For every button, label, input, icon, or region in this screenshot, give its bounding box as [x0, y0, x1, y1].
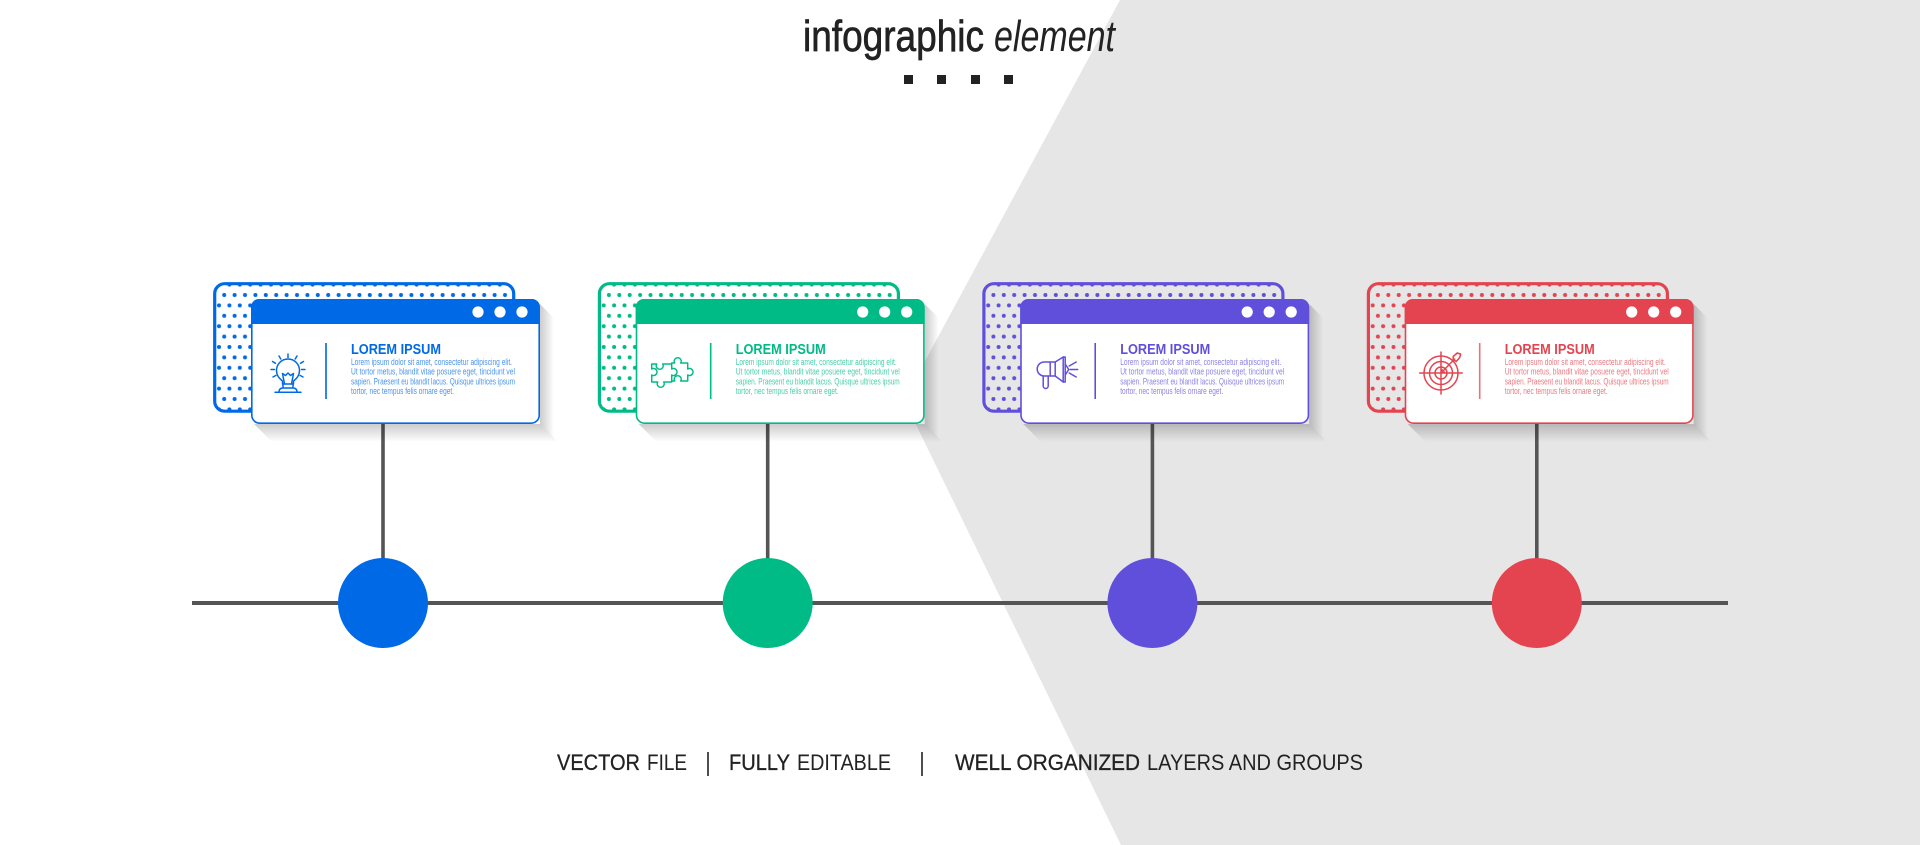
card header bar	[1405, 299, 1694, 324]
window dots	[1626, 306, 1681, 318]
icon: target with arrow	[1420, 352, 1462, 394]
body text: Ut tortor metus, blandit vitae posuere eget, tincidunt vel	[1120, 367, 1284, 377]
timeline node: blue	[338, 558, 428, 648]
heading: LOREM IPSUM	[1120, 342, 1210, 358]
footer caption: WELL ORGANIZED	[955, 750, 1140, 775]
divider	[325, 343, 327, 399]
dotted back card	[1368, 284, 1667, 411]
dotted back card	[599, 284, 898, 411]
card header bar	[251, 299, 540, 324]
body text: Lorem ipsum dolor sit amet, consectetur adipiscing elit.	[736, 357, 897, 367]
body text	[1120, 357, 1284, 396]
body text: Lorem ipsum dolor sit amet, consectetur adipiscing elit.	[1120, 357, 1281, 367]
body text: tortor, nec tempus felis ornare eget.	[736, 386, 839, 396]
title: element	[994, 12, 1116, 61]
card shadow	[1408, 304, 1712, 442]
body text	[736, 357, 900, 396]
body text: Ut tortor metus, blandit vitae posuere eget, tincidunt vel	[351, 367, 515, 377]
front card	[1021, 300, 1308, 423]
heading: LOREM IPSUM	[351, 342, 441, 358]
title	[803, 12, 1116, 61]
body text: sapien. Praesent eu blandit lacus. Quisque ultrices ipsum	[1120, 376, 1284, 386]
icon: megaphone	[1037, 357, 1078, 389]
window dots	[857, 306, 912, 318]
card shadow	[254, 304, 558, 442]
body text: Ut tortor metus, blandit vitae posuere eget, tincidunt vel	[1505, 367, 1669, 377]
heading: LOREM IPSUM	[736, 342, 826, 358]
dotted back card	[984, 284, 1283, 411]
icon: light bulb	[271, 354, 305, 392]
card header bar	[636, 299, 925, 324]
timeline node: purple	[1107, 558, 1197, 648]
footer caption: FULLY	[729, 750, 790, 775]
body text	[351, 357, 515, 396]
card shadow	[639, 304, 943, 442]
body text: Ut tortor metus, blandit vitae posuere eget, tincidunt vel	[736, 367, 900, 377]
body text: sapien. Praesent eu blandit lacus. Quisque ultrices ipsum	[1505, 376, 1669, 386]
panel: green card	[599, 284, 943, 442]
window dots	[1242, 306, 1297, 318]
panel: blue card	[215, 284, 558, 442]
footer caption: VECTOR	[557, 750, 640, 775]
body text: Lorem ipsum dolor sit amet, consectetur adipiscing elit.	[351, 357, 512, 367]
divider	[1479, 343, 1480, 399]
body text: tortor, nec tempus felis ornare eget.	[1505, 386, 1608, 396]
timeline axis	[192, 601, 1728, 605]
divider	[1094, 343, 1096, 399]
panel: purple card	[984, 284, 1327, 442]
body text	[1505, 357, 1669, 396]
footer caption: LAYERS AND GROUPS	[1147, 750, 1363, 775]
footer caption: EDITABLE	[797, 750, 891, 775]
front card	[636, 300, 924, 423]
timeline node: green	[723, 558, 813, 648]
footer caption	[557, 750, 1363, 776]
icon: puzzle pieces	[652, 358, 693, 387]
body text: sapien. Praesent eu blandit lacus. Quisque ultrices ipsum	[736, 376, 900, 386]
background: gray angled panel	[904, 0, 1920, 845]
timeline node: red	[1492, 558, 1582, 648]
front card	[252, 300, 539, 423]
dotted back card	[215, 284, 514, 411]
body text: Lorem ipsum dolor sit amet, consectetur adipiscing elit.	[1505, 357, 1666, 367]
divider	[710, 343, 712, 399]
card header bar	[1020, 299, 1309, 324]
body text: sapien. Praesent eu blandit lacus. Quisque ultrices ipsum	[351, 376, 515, 386]
body text: tortor, nec tempus felis ornare eget.	[351, 386, 454, 396]
panel: red card	[1368, 284, 1712, 442]
footer caption: FILE	[647, 750, 687, 775]
title marker squares	[904, 75, 1013, 84]
connector stems	[381, 420, 1539, 560]
title: infographic	[803, 12, 984, 61]
heading: LOREM IPSUM	[1505, 342, 1595, 358]
window dots	[472, 306, 528, 318]
card shadow	[1023, 304, 1327, 442]
front card	[1406, 300, 1693, 423]
body text: tortor, nec tempus felis ornare eget.	[1120, 386, 1223, 396]
